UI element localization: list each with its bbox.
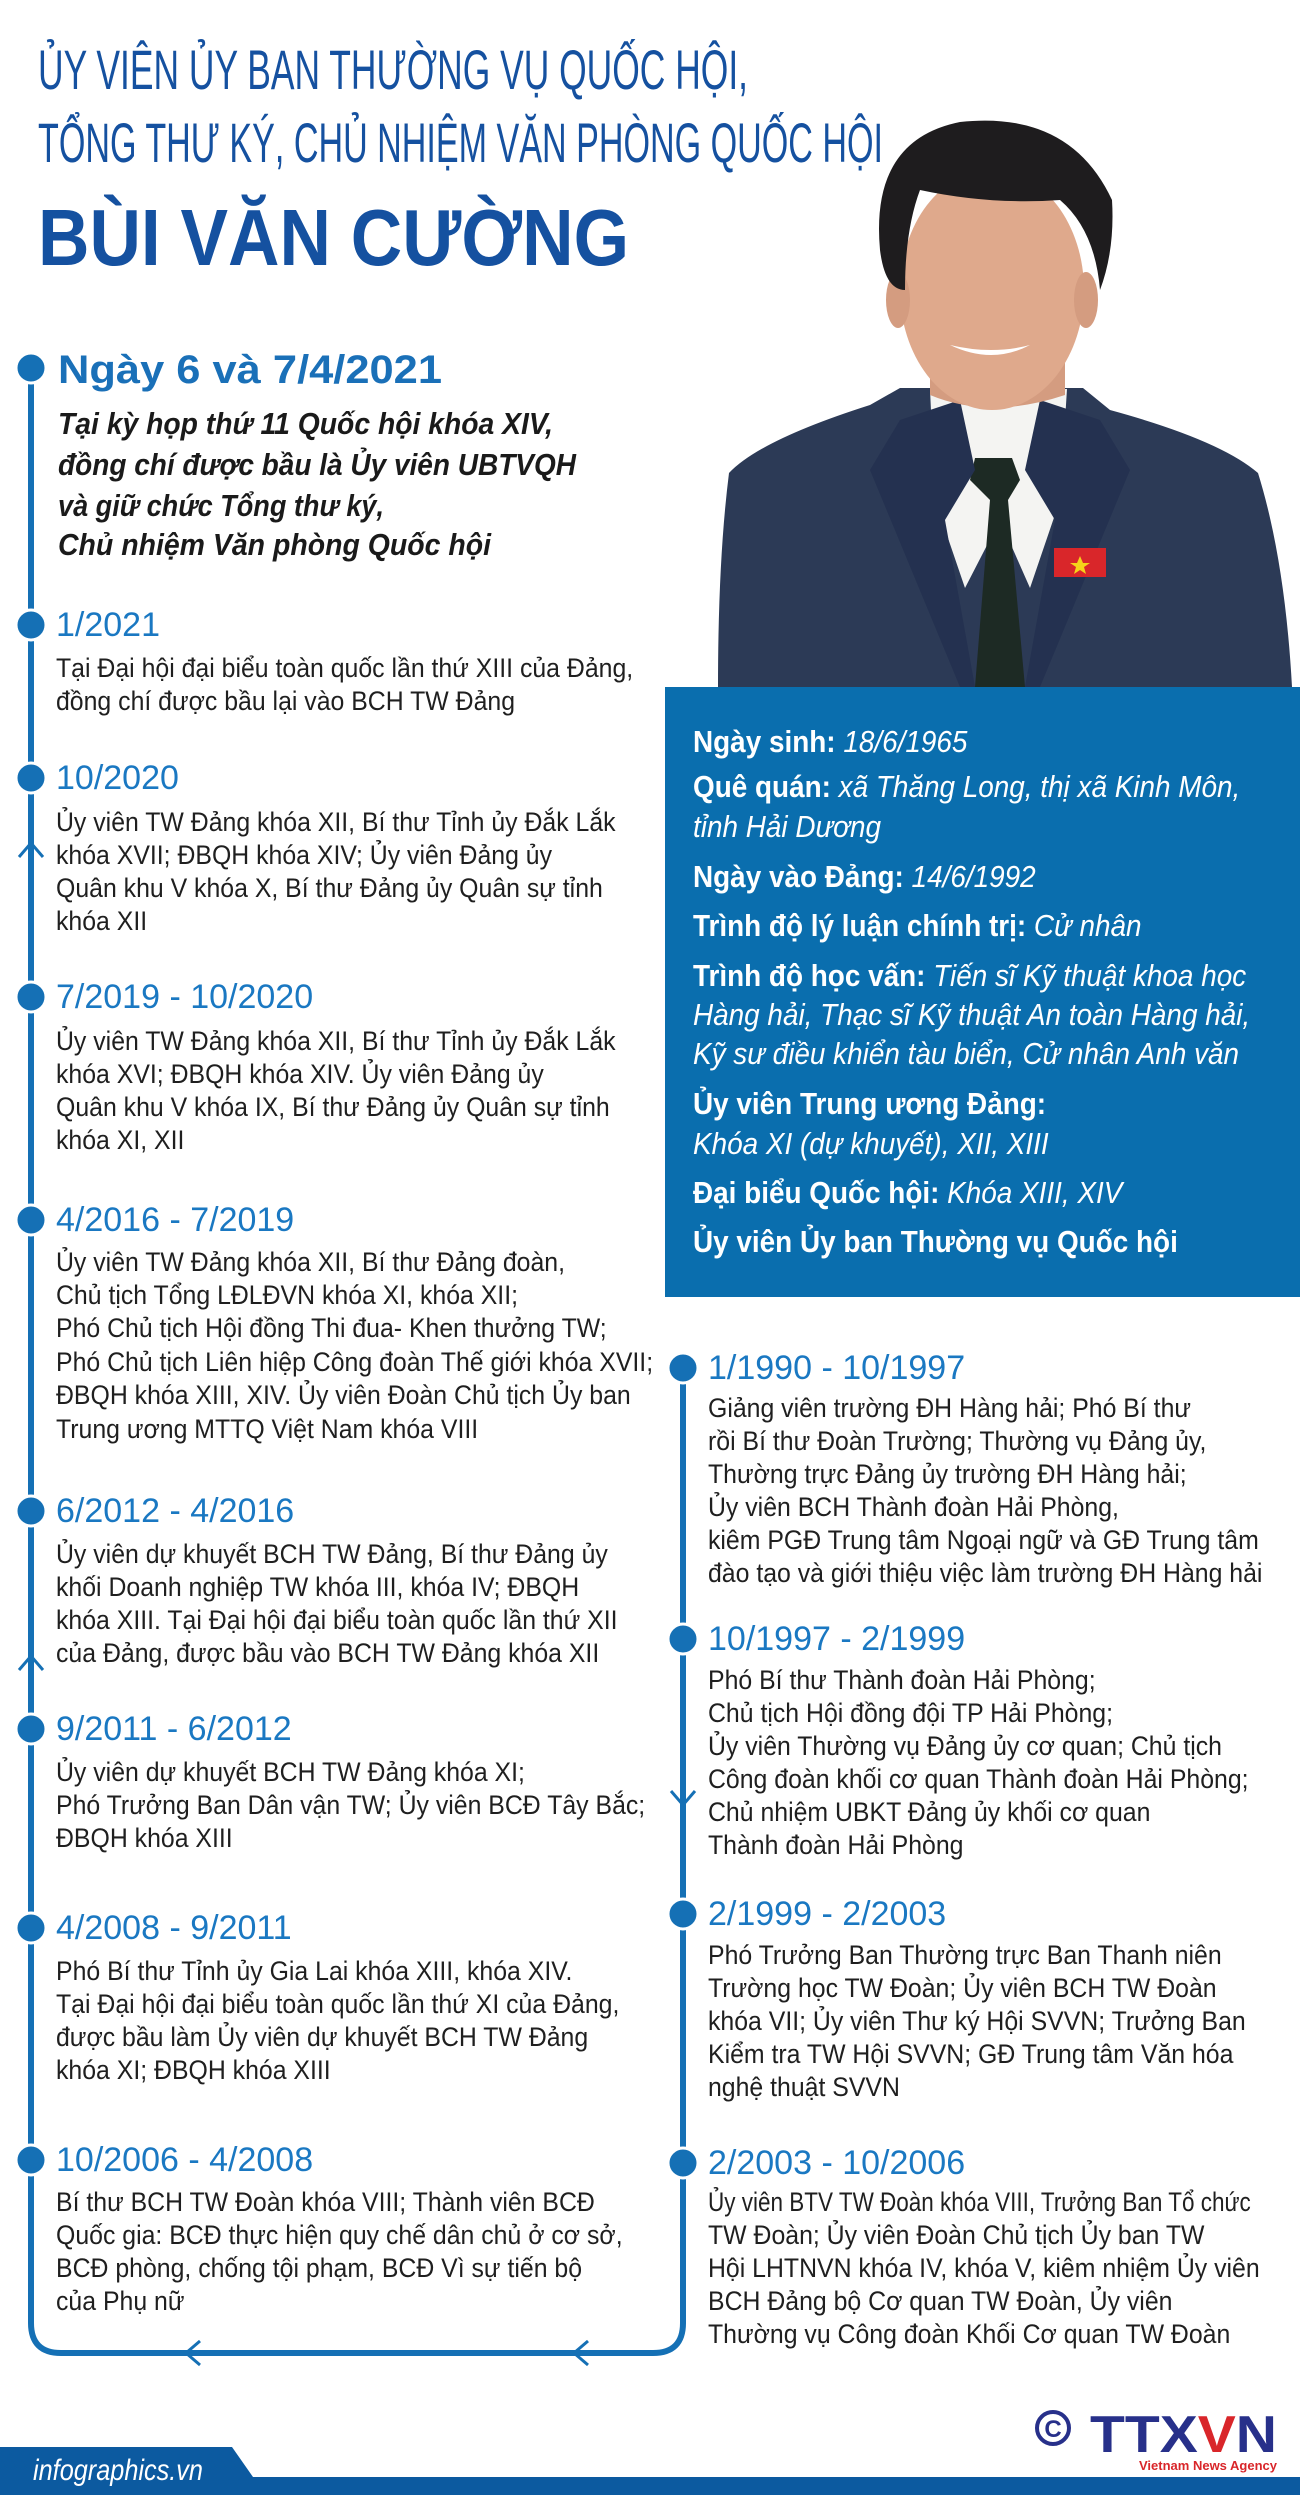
entry: 4/2016 - 7/2019: Phó Chủ tịch Hội đồng Thi đua- Khen thưởng TW;	[56, 1314, 607, 1343]
entry: 10/1997 - 2/1999: Công đoàn khối cơ quan Thành đoàn Hải Phòng;	[708, 1765, 1249, 1794]
entry: 2/2003 - 10/2006: TW Đoàn; Ủy viên Đoàn Chủ tịch Ủy ban TW	[708, 2219, 1205, 2250]
entry: 10/1997 - 2/1999: Chủ nhiệm UBKT Đảng ủy khối cơ quan	[708, 1798, 1150, 1827]
footer bar	[0, 2447, 1300, 2495]
entry: 1/1990 - 10/1997: rồi Bí thư Đoàn Trường; Thường vụ Đảng ủy,	[708, 1427, 1206, 1456]
info panel	[665, 687, 1300, 1297]
entry: 10/2020: khóa XII	[56, 907, 147, 936]
entry: 4/2016 - 7/2019: Trung ương MTTQ Việt Nam khóa VIII	[56, 1415, 478, 1444]
entry: 4/2008 - 9/2011	[56, 1909, 619, 2085]
entry: 2/1999 - 2/2003	[708, 1895, 1246, 2102]
info panel: Ủy viên Ủy ban Thường vụ Quốc hội	[693, 1224, 1178, 1259]
entry: 4/2016 - 7/2019: 4/2016 - 7/2019	[56, 1201, 294, 1239]
info panel: Trình độ học vấn: Tiến sĩ Kỹ thuật khoa học	[693, 959, 1246, 993]
entry: 7/2019 - 10/2020: Quân khu V khóa IX, Bí thư Đảng ủy Quân sự tỉnh	[56, 1093, 610, 1122]
entry: 2/2003 - 10/2006	[708, 2144, 1260, 2349]
entry: 1/2021: Tại Đại hội đại biểu toàn quốc lần thứ XIII của Đảng,	[56, 654, 633, 683]
entry: 9/2011 - 6/2012: ĐBQH khóa XIII	[56, 1824, 233, 1853]
entry: 4/2016 - 7/2019: Phó Chủ tịch Liên hiệp Công đoàn Thế giới khóa XVII;	[56, 1348, 653, 1377]
entry: 4/2008 - 9/2011: 4/2008 - 9/2011	[56, 1909, 292, 1947]
entry: 7/2019 - 10/2020: khóa XI, XII	[56, 1126, 184, 1155]
entry: 10/2006 - 4/2008: Quốc gia: BCĐ thực hiện quy chế dân chủ ở cơ sở,	[56, 2221, 623, 2250]
entry: 10/2006 - 4/2008: BCĐ phòng, chống tội phạm, BCĐ Vì sự tiến bộ	[56, 2254, 582, 2283]
logo: TTXVN: Vietnam News Agency	[1139, 2458, 1278, 2473]
entry: 10/2006 - 4/2008: của Phụ nữ	[56, 2287, 184, 2316]
entry: 10/2020: Quân khu V khóa X, Bí thư Đảng ủy Quân sự tỉnh	[56, 874, 603, 903]
entry: 6-7/4/2021	[58, 348, 577, 562]
title: BÙI VĂN CƯỜNG	[38, 193, 629, 282]
entry: 6-7/4/2021: Tại kỳ họp thứ 11 Quốc hội khóa XIV,	[58, 406, 553, 441]
entry: 1/2021: 1/2021	[56, 606, 160, 644]
entry: 10/1997 - 2/1999: Chủ tịch Hội đồng đội TP Hải Phòng;	[708, 1699, 1113, 1728]
entry: 10/1997 - 2/1999: 10/1997 - 2/1999	[708, 1620, 965, 1658]
entry: 2/1999 - 2/2003: nghệ thuật SVVN	[708, 2073, 900, 2102]
entry: 6-7/4/2021: đồng chí được bầu là Ủy viên UBTVQH	[58, 446, 577, 482]
info panel: Khóa XI (dự khuyết), XII, XIII	[693, 1127, 1049, 1161]
entry: 10/1997 - 2/1999: Thành đoàn Hải Phòng	[708, 1831, 963, 1860]
entry: 6/2012 - 4/2016: Ủy viên dự khuyết BCH TW Đảng, Bí thư Đảng ủy	[56, 1538, 608, 1569]
entry: 4/2016 - 7/2019: Ủy viên TW Đảng khóa XII, Bí thư Đảng đoàn,	[56, 1246, 565, 1277]
info panel: Ủy viên Trung ương Đảng:	[693, 1086, 1046, 1121]
entry: 1/1990 - 10/1997: kiêm PGĐ Trung tâm Ngoại ngữ và GĐ Trung tâm	[708, 1526, 1259, 1555]
timeline dots	[16, 353, 698, 2178]
entry: 2/1999 - 2/2003: Kiểm tra TW Hội SVVN; GĐ Trung tâm Văn hóa	[708, 2040, 1234, 2069]
entry: 4/2008 - 9/2011: được bầu làm Ủy viên dự khuyết BCH TW Đảng	[56, 2021, 588, 2052]
entry: 4/2008 - 9/2011: Tại Đại hội đại biểu toàn quốc lần thứ XI của Đảng,	[56, 1990, 619, 2019]
entry: 10/1997 - 2/1999: Ủy viên Thường vụ Đảng ủy cơ quan; Chủ tịch	[708, 1730, 1222, 1761]
entry: 7/2019 - 10/2020: khóa XVI; ĐBQH khóa XIV. Ủy viên Đảng ủy	[56, 1058, 544, 1089]
entry: 6-7/4/2021: Chủ nhiệm Văn phòng Quốc hội	[58, 527, 492, 562]
arrows on timeline	[19, 843, 695, 2365]
entry: 10/2006 - 4/2008: Bí thư BCH TW Đoàn khóa VIII; Thành viên BCĐ	[56, 2188, 595, 2217]
title: ỦY VIÊN ỦY BAN THƯỜNG VỤ QUỐC HỘI,	[38, 38, 748, 101]
info panel: Kỹ sư điều khiển tàu biển, Cử nhân Anh văn	[693, 1037, 1239, 1071]
entry: 6/2012 - 4/2016	[56, 1492, 618, 1668]
entry: 7/2019 - 10/2020: 7/2019 - 10/2020	[56, 978, 313, 1016]
title	[38, 38, 883, 282]
info panel: Đại biểu Quốc hội: Khóa XIII, XIV	[693, 1176, 1125, 1210]
footer bar: infographics.vn	[33, 2454, 203, 2487]
entry: 10/2006 - 4/2008: 10/2006 - 4/2008	[56, 2141, 313, 2179]
entry: 1/1990 - 10/1997	[708, 1349, 1262, 1588]
entry: 2/2003 - 10/2006: Thường vụ Công đoàn Khối Cơ quan TW Đoàn	[708, 2320, 1230, 2349]
entry: 10/1997 - 2/1999	[708, 1620, 1249, 1860]
entry: 9/2011 - 6/2012: Phó Trưởng Ban Dân vận TW; Ủy viên BCĐ Tây Bắc;	[56, 1789, 645, 1820]
entry: 2/1999 - 2/2003: 2/1999 - 2/2003	[708, 1895, 946, 1933]
logo: TTXVN: C	[1044, 2416, 1062, 2443]
entry: 10/2020: 10/2020	[56, 759, 179, 797]
entry: 9/2011 - 6/2012	[56, 1710, 645, 1853]
entry: 1/2021	[56, 606, 633, 716]
entry: 10/2006 - 4/2008	[56, 2141, 623, 2316]
entry: 2/2003 - 10/2006: Ủy viên BTV TW Đoàn khóa VIII, Trưởng Ban Tổ chức	[708, 2186, 1251, 2217]
entry: 10/2020: khóa XVII; ĐBQH khóa XIV; Ủy viên Đảng ủy	[56, 839, 552, 870]
info panel: tỉnh Hải Dương	[693, 810, 882, 844]
info panel: Trình độ lý luận chính trị: Cử nhân	[693, 909, 1142, 943]
entry: 10/2020	[56, 759, 616, 936]
logo: TTXVN	[1037, 2406, 1278, 2473]
entry: 6-7/4/2021: và giữ chức Tổng thư ký,	[58, 488, 384, 523]
entry: 7/2019 - 10/2020: Ủy viên TW Đảng khóa XII, Bí thư Tỉnh ủy Đắk Lắk	[56, 1025, 616, 1056]
entry: 1/1990 - 10/1997: Thường trực Đảng ủy trường ĐH Hàng hải;	[708, 1460, 1187, 1489]
entry: 2/2003 - 10/2006: Hội LHTNVN khóa IV, khóa V, kiêm nhiệm Ủy viên	[708, 2252, 1260, 2283]
entry: 4/2016 - 7/2019: ĐBQH khóa XIII, XIV. Ủy viên Đoàn Chủ tịch Ủy ban	[56, 1379, 631, 1410]
entry: 6/2012 - 4/2016: của Đảng, được bầu vào BCH TW Đảng khóa XII	[56, 1639, 599, 1668]
entry: 10/2020: Ủy viên TW Đảng khóa XII, Bí thư Tỉnh ủy Đắk Lắk	[56, 806, 616, 837]
entry: 1/1990 - 10/1997: Giảng viên trường ĐH Hàng hải; Phó Bí thư	[708, 1394, 1191, 1423]
timeline line	[31, 368, 683, 2353]
entry: 6-7/4/2021: Ngày 6 và 7/4/2021	[58, 348, 442, 392]
entry: 9/2011 - 6/2012: 9/2011 - 6/2012	[56, 1710, 292, 1748]
entry: 1/2021: đồng chí được bầu lại vào BCH TW Đảng	[56, 687, 515, 716]
entry: 4/2016 - 7/2019: Chủ tịch Tổng LĐLĐVN khóa XI, khóa XII;	[56, 1281, 518, 1310]
entry: 2/1999 - 2/2003: khóa VII; Ủy viên Thư ký Hội SVVN; Trưởng Ban	[708, 2005, 1246, 2036]
info panel: Quê quán: xã Thăng Long, thị xã Kinh Môn,	[693, 770, 1240, 804]
entry: 1/1990 - 10/1997: Ủy viên BCH Thành đoàn Hải Phòng,	[708, 1491, 1119, 1522]
entry: 2/1999 - 2/2003: Phó Trưởng Ban Thường trực Ban Thanh niên	[708, 1941, 1222, 1970]
entry: 1/1990 - 10/1997: đào tạo và giới thiệu việc làm trường ĐH Hàng hải	[708, 1559, 1262, 1588]
entry: 4/2008 - 9/2011: khóa XI; ĐBQH khóa XIII	[56, 2056, 331, 2085]
info panel: Hàng hải, Thạc sĩ Kỹ thuật An toàn Hàng hải,	[693, 998, 1250, 1032]
entry: 7/2019 - 10/2020	[56, 978, 616, 1155]
entry: 6/2012 - 4/2016: khóa XIII. Tại Đại hội đại biểu toàn quốc lần thứ XII	[56, 1606, 618, 1635]
entry: 2/1999 - 2/2003: Trường học TW Đoàn; Ủy viên BCH TW Đoàn	[708, 1972, 1217, 2003]
logo: TTXVN: TTXVN	[1090, 2406, 1277, 2464]
entry: 10/1997 - 2/1999: Phó Bí thư Thành đoàn Hải Phòng;	[708, 1666, 1096, 1695]
portrait photo	[718, 121, 1292, 687]
entry: 9/2011 - 6/2012: Ủy viên dự khuyết BCH TW Đảng khóa XI;	[56, 1756, 525, 1787]
info panel: Ngày sinh: 18/6/1965	[693, 725, 968, 759]
entry: 6/2012 - 4/2016: khối Doanh nghiệp TW khóa III, khóa IV; ĐBQH	[56, 1573, 579, 1602]
entry: 4/2008 - 9/2011: Phó Bí thư Tỉnh ủy Gia Lai khóa XIII, khóa XIV.	[56, 1957, 572, 1986]
info panel: Ngày vào Đảng: 14/6/1992	[693, 860, 1036, 894]
entry: 6/2012 - 4/2016: 6/2012 - 4/2016	[56, 1492, 294, 1530]
entry: 2/2003 - 10/2006: BCH Đảng bộ Cơ quan TW Đoàn, Ủy viên	[708, 2285, 1172, 2316]
entry: 1/1990 - 10/1997: 1/1990 - 10/1997	[708, 1349, 965, 1387]
entry: 4/2016 - 7/2019	[56, 1201, 653, 1444]
entry: 2/2003 - 10/2006: 2/2003 - 10/2006	[708, 2144, 965, 2182]
